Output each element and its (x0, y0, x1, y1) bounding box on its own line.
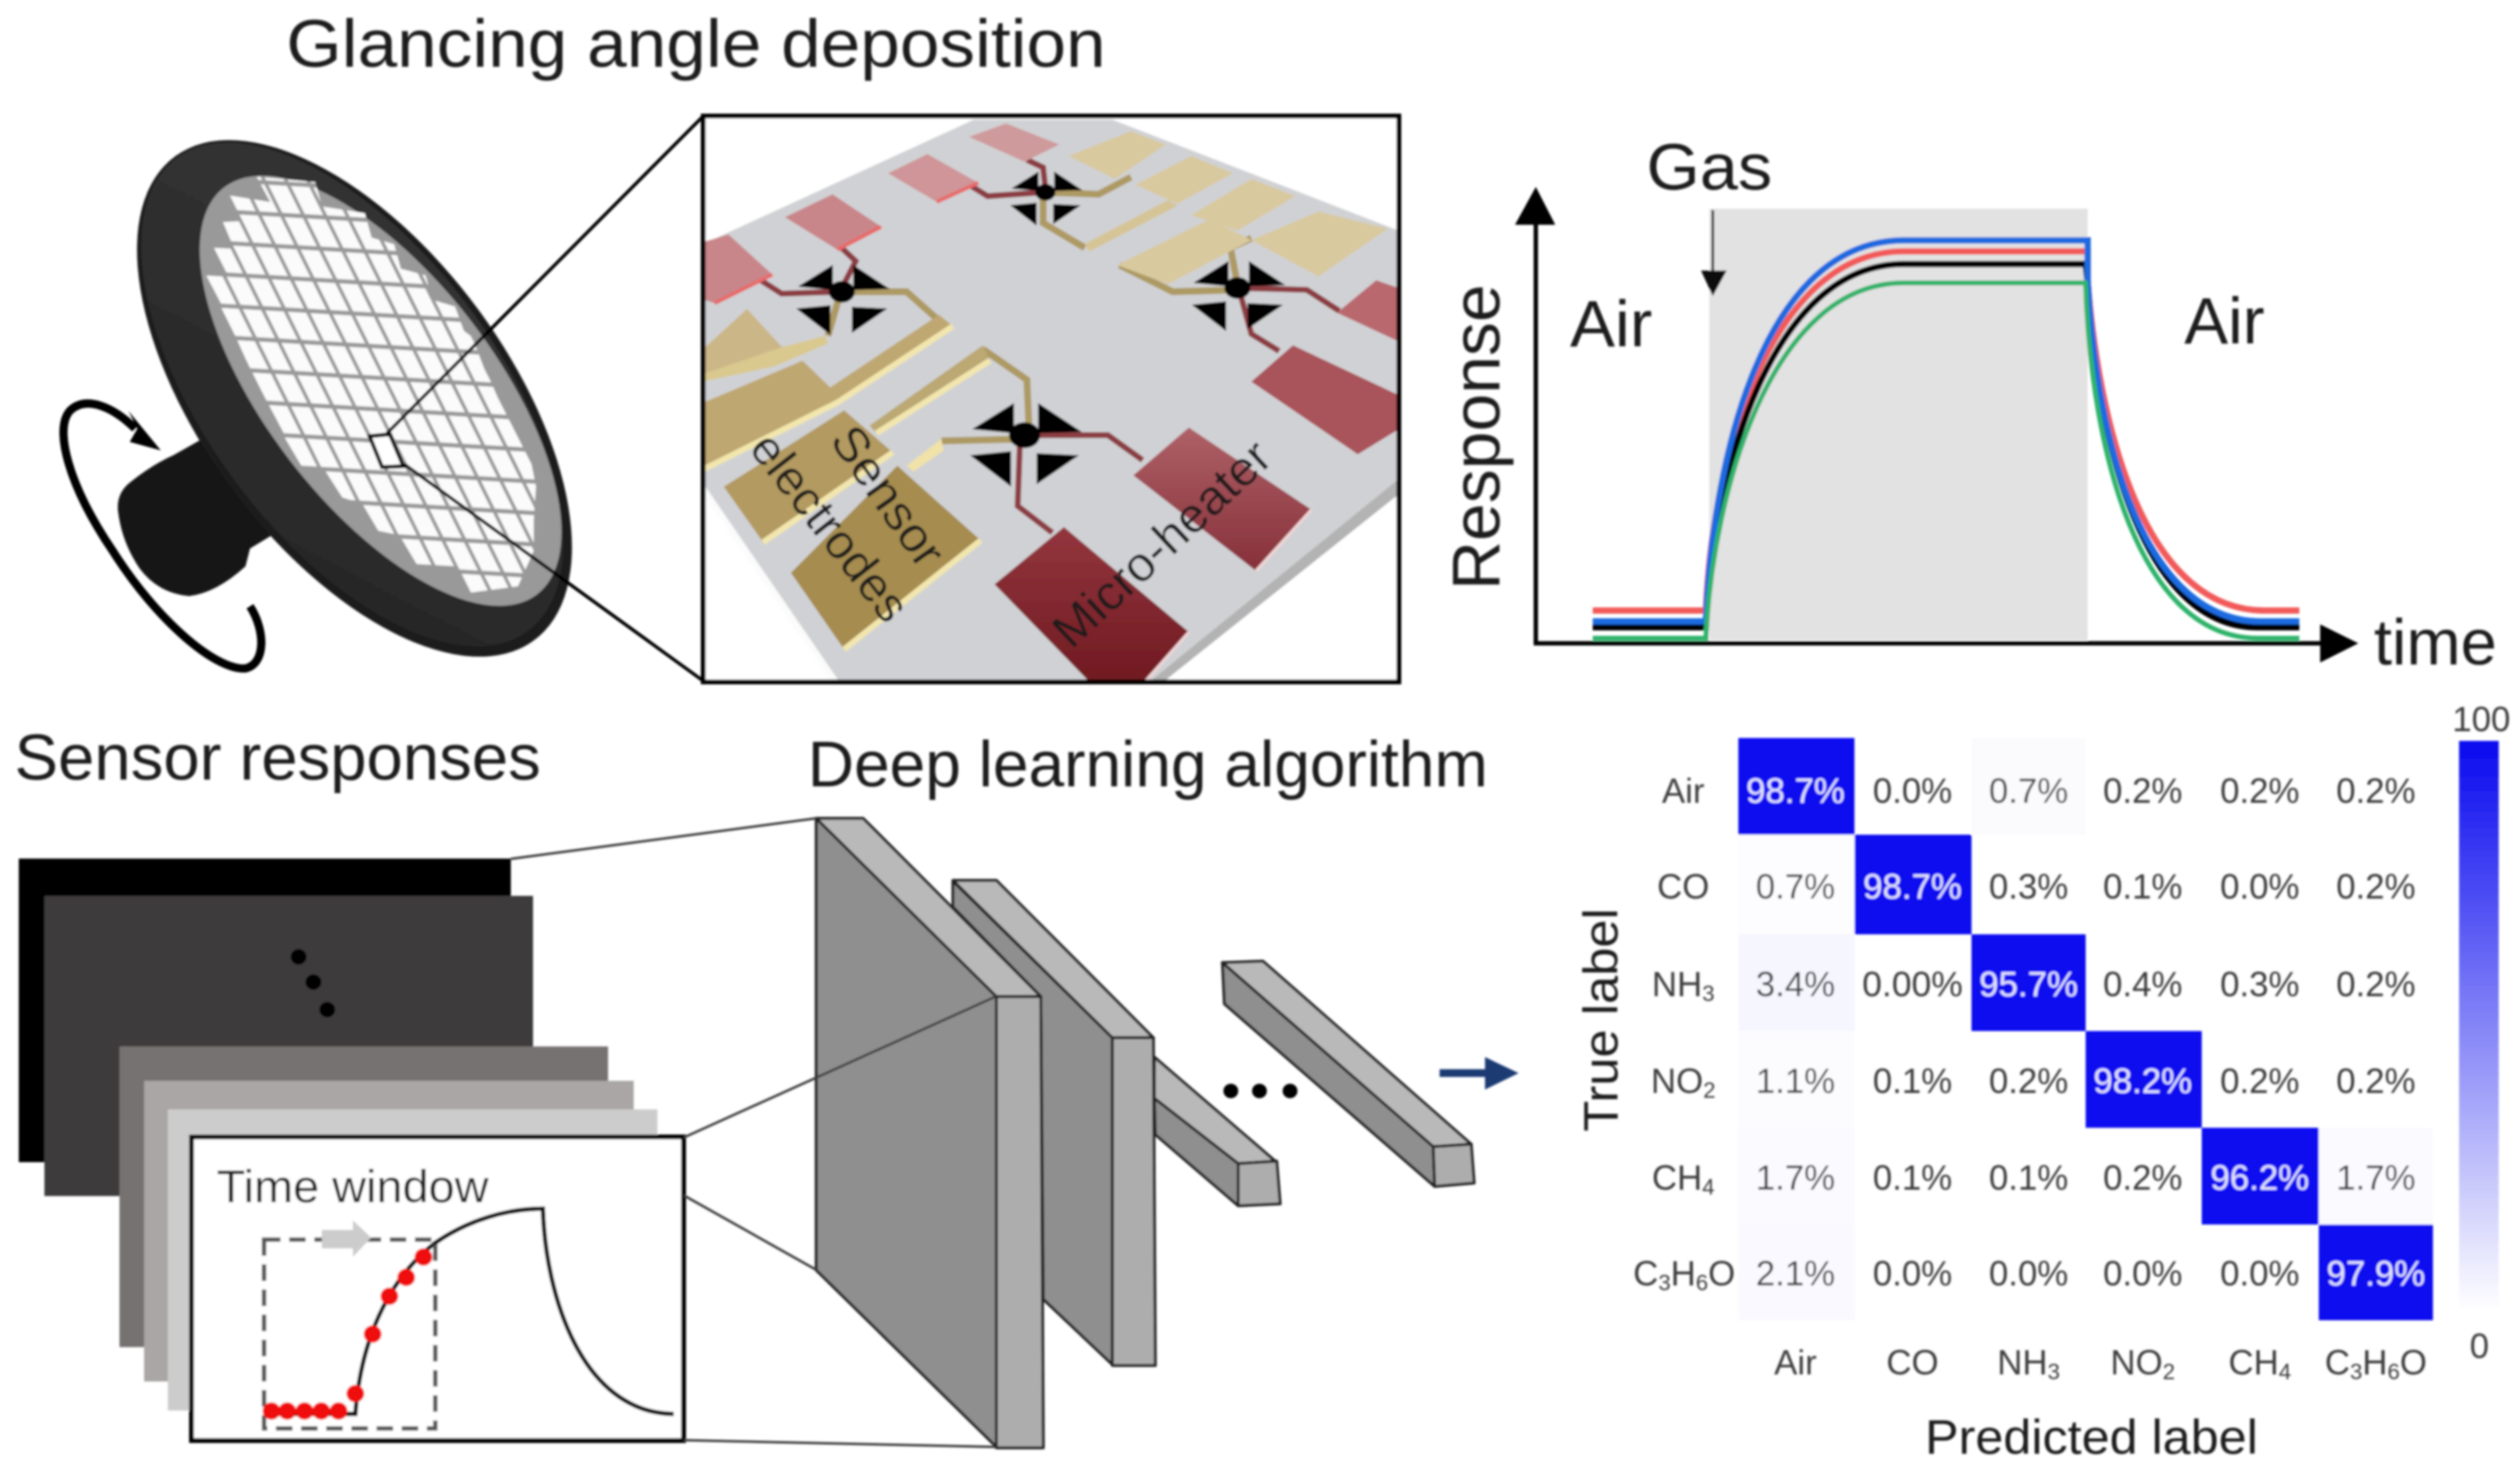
label: Air after: Air (2184, 284, 2265, 358)
blue curve (1592, 241, 2299, 622)
zoom lines to inset (387, 116, 703, 681)
sensor electrode pads (703, 132, 1388, 649)
row: C3H6O (1633, 1254, 2425, 1295)
icon: sensing element left (796, 265, 890, 335)
response frames (18, 859, 658, 1410)
column labels: NO (2111, 1342, 2163, 1382)
column labels: 3 (2048, 1359, 2060, 1384)
column labels: NH (1998, 1342, 2048, 1382)
row: CO: 0.7% (1756, 867, 1835, 906)
row: CH4: 96.2% (2210, 1158, 2309, 1197)
row: NO2: 2 (1704, 1077, 1715, 1103)
layer 3 (1154, 1057, 1280, 1206)
panel: device inset (703, 115, 1399, 682)
row: NH3: 0.00% (1862, 964, 1963, 1004)
panel: response chart (1438, 131, 2497, 679)
row: Air: 98.7% (1746, 771, 1845, 811)
row: CH4: 1.7% (2336, 1158, 2416, 1197)
label: electrodes: electrodes (740, 422, 920, 633)
column labels: 3 (2350, 1359, 2362, 1384)
panel: confusion matrix (1633, 699, 2510, 1384)
column labels: H (2362, 1342, 2387, 1382)
row: Air: 0.7% (1989, 771, 2068, 811)
inset frame (703, 116, 1399, 682)
column labels: 2 (2163, 1359, 2175, 1384)
selected chip marker (370, 434, 403, 467)
gas arrow (1701, 210, 1727, 296)
layer 4 (1223, 961, 1474, 1187)
row: Air: 0.0% (1873, 771, 1952, 811)
colorbar (2459, 741, 2499, 1311)
title: Glancing angle deposition: Glancing angle deposition (286, 6, 1106, 81)
ellipsis dots (1224, 1083, 1297, 1098)
heater traces (761, 160, 1339, 533)
wafer surface (133, 119, 628, 663)
row: C3H6O: 97.9% (2327, 1254, 2425, 1293)
row: NO2: NO (1651, 1061, 1704, 1101)
sampled points (262, 1249, 432, 1420)
row: CH4: 4 (1703, 1174, 1715, 1199)
row: CH4: 0.1% (1873, 1158, 1952, 1197)
wafer ring (52, 67, 657, 729)
label: Air before: Air (1570, 287, 1652, 361)
panel: sensor response stack (18, 859, 684, 1440)
substrate (703, 120, 1399, 682)
row: C3H6O: H (1671, 1254, 1696, 1293)
label: Time window: Time window (217, 1161, 489, 1212)
row: CH4: 0.2% (2103, 1158, 2182, 1197)
gold traces (828, 177, 1252, 441)
column labels: Air (1774, 1342, 1817, 1382)
row: NO2: 98.2% (2093, 1061, 2192, 1101)
column labels: CH (2229, 1342, 2279, 1382)
row: CH4: 1.7% (1756, 1158, 1835, 1197)
row: C3H6O: 3 (1658, 1270, 1671, 1295)
axis label: Predicted label: Predicted label (1925, 1410, 2258, 1464)
panel: rotating wafer holder (58, 138, 574, 675)
label: Gas: Gas (1646, 131, 1772, 204)
row: Air: 0.2% (2220, 771, 2299, 811)
icon: sensing element right (1192, 261, 1286, 331)
column labels (1774, 1342, 2427, 1384)
row: NH3 (1652, 964, 2416, 1006)
row: C3H6O: O (1708, 1254, 1735, 1293)
sensor chip grid (205, 175, 538, 594)
matrix cells (1738, 738, 2433, 1320)
row: CO: 0.1% (2103, 867, 2182, 906)
icon: sensing element back (1010, 171, 1082, 225)
row: NH3: NH (1652, 964, 1703, 1004)
colorbar min: 0 (2470, 1326, 2489, 1366)
panel: neural network layers (511, 818, 1519, 1448)
colorbar max: 100 (2452, 699, 2510, 739)
row: CO: CO (1657, 867, 1709, 906)
row: NH3: 3 (1703, 981, 1714, 1006)
row: NH3: 0.4% (2103, 964, 2182, 1004)
row: Air: 0.2% (2336, 771, 2416, 811)
layer 2 (953, 880, 1155, 1366)
row: C3H6O: 2.1% (1756, 1254, 1835, 1293)
icon: window direction arrow (322, 1221, 371, 1257)
row: C3H6O: 0.0% (1989, 1254, 2068, 1293)
gas exposure region (1709, 209, 2088, 640)
row: C3H6O: 6 (1696, 1270, 1708, 1295)
black curve (1592, 264, 2299, 628)
row: NH3: 3.4% (1756, 964, 1835, 1004)
substrate edge (1152, 480, 1399, 682)
dashed time window (264, 1240, 435, 1429)
row: NO2: 1.1% (1756, 1061, 1835, 1101)
row: CH4: CH (1652, 1158, 1703, 1197)
row: NH3: 0.3% (2220, 964, 2299, 1004)
heading: Deep learning algorithm: Deep learning algorithm (808, 728, 1488, 801)
column labels: CO (1886, 1342, 1939, 1382)
column labels: C (2325, 1342, 2350, 1382)
icon: sensing element front (970, 403, 1082, 487)
front frame (192, 1137, 684, 1440)
row: NO2 (1651, 1061, 2416, 1103)
layer 1 (816, 818, 1043, 1448)
row: NO2: 0.1% (1873, 1061, 1952, 1101)
column labels: O (2400, 1342, 2427, 1382)
connector lines (511, 818, 996, 1447)
row: CH4 (1652, 1158, 2416, 1199)
row: C3H6O: 0.0% (1873, 1254, 1952, 1293)
axis label: True label: True label (1574, 908, 1628, 1132)
row: NO2: 0.2% (2220, 1061, 2299, 1101)
column labels: 4 (2279, 1359, 2292, 1384)
row: Air (1662, 771, 2416, 811)
arrow to confusion matrix (1439, 1057, 1519, 1089)
row: NO2: 0.2% (1989, 1061, 2068, 1101)
heading: Sensor responses: Sensor responses (15, 722, 541, 794)
column labels: 6 (2387, 1359, 2400, 1384)
row: CO: 98.7% (1863, 867, 1962, 906)
label: Sensor: Sensor (820, 415, 956, 577)
row: C3H6O: C (1633, 1254, 1658, 1293)
row: CO (1657, 867, 2416, 906)
row: NO2: 0.2% (2336, 1061, 2416, 1101)
label: Micro-heater: Micro-heater (1042, 429, 1282, 658)
row: Air: Air (1662, 771, 1705, 811)
x axis label: time (2374, 606, 2497, 679)
icon: rotation arrow (64, 403, 261, 668)
row: CO: 0.2% (2336, 867, 2416, 906)
holder stem (118, 437, 280, 596)
axes (1515, 187, 2358, 663)
red curve (1592, 251, 2299, 610)
row: NH3: 0.2% (2336, 964, 2416, 1004)
row: NH3: 95.7% (1979, 964, 2078, 1004)
row: CH4: 0.1% (1989, 1158, 2068, 1197)
row: Air: 0.2% (2103, 771, 2182, 811)
row: CO: 0.3% (1989, 867, 2068, 906)
row: C3H6O: 0.0% (2220, 1254, 2299, 1293)
green curve (1592, 283, 2299, 638)
row: CO: 0.0% (2220, 867, 2299, 906)
row: C3H6O: 0.0% (2103, 1254, 2182, 1293)
y axis label: Response (1438, 284, 1514, 590)
micro-heater pads (703, 124, 1399, 682)
response curve (267, 1209, 673, 1414)
lower-left shadow (703, 479, 842, 682)
